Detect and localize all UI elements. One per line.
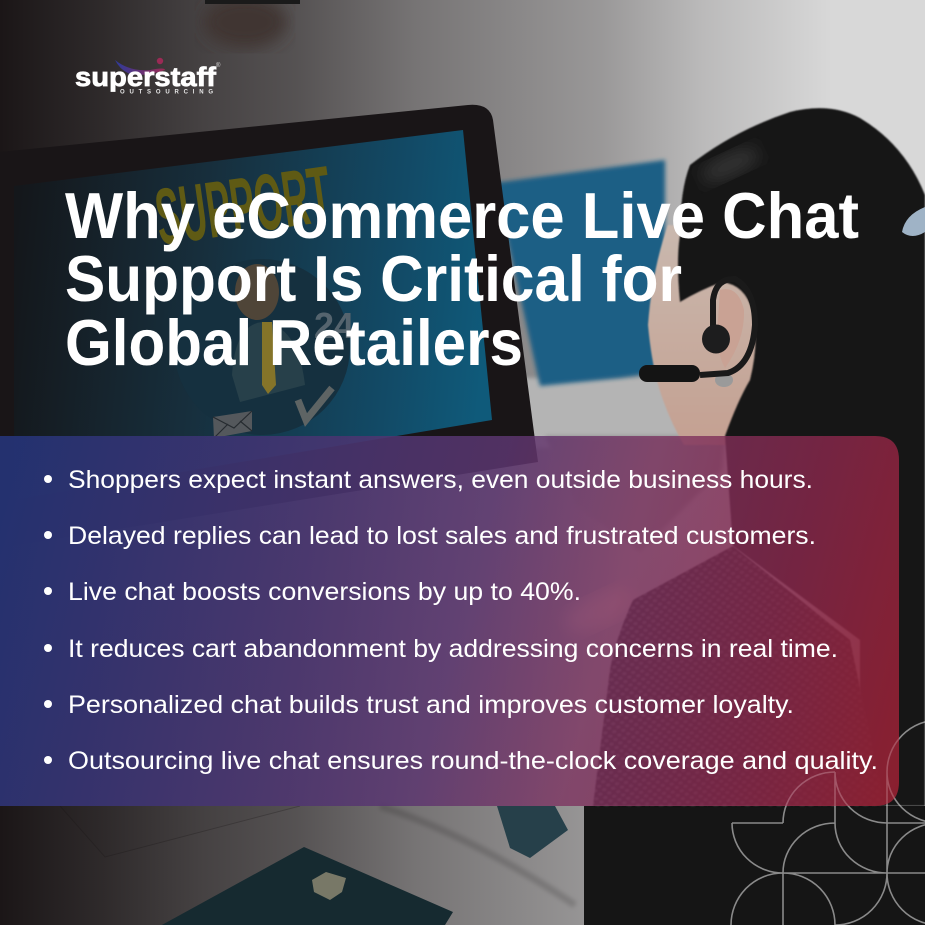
title: Global Retailers — [65, 306, 523, 379]
hair highlight — [696, 141, 764, 189]
earring — [715, 373, 733, 387]
logo: superstaff outsourcing: superstaff — [75, 62, 217, 92]
decorative geometric line pattern — [731, 720, 925, 925]
screen icon: check mark — [298, 388, 332, 420]
reason 1: Shoppers expect instant answers, even outside business hours. — [68, 466, 813, 494]
panel: key reasons — [0, 436, 899, 806]
logo: superstaff outsourcing: OUTSOURCING — [120, 90, 213, 96]
screen icon: envelope — [213, 411, 252, 438]
reason 5: Personalized chat builds trust and improves customer loyalty. — [68, 691, 794, 719]
ear — [717, 289, 744, 368]
sunglasses — [497, 806, 568, 858]
reason 2: Delayed replies can lead to lost sales and frustrated customers. — [68, 522, 816, 550]
bullet list — [44, 466, 878, 775]
woman: neck and face — [648, 225, 760, 445]
reason 4: It reduces cart abandonment by addressing concerns in real time. — [68, 635, 838, 663]
second blue monitor — [495, 160, 665, 386]
reason 6: Outsourcing live chat ensures round-the-clock coverage and quality. — [68, 747, 878, 775]
woman: hair tie — [902, 207, 925, 236]
main monitor — [0, 105, 538, 548]
title: Support Is Critical for — [65, 242, 682, 315]
closed notebook — [140, 847, 453, 925]
screen numeral: 24: 24 — [314, 305, 354, 346]
blurred object at top of photo — [203, 0, 300, 48]
main monitor: SUPPORT — [150, 149, 337, 262]
desk surface upper — [500, 378, 730, 448]
title — [65, 179, 859, 379]
stack of books under panel — [545, 436, 725, 552]
reason 3: Live chat boosts conversions by up to 40%. — [68, 578, 581, 606]
woman: hand on desk — [559, 579, 641, 641]
screen illustration: agent — [174, 259, 350, 435]
woman: hair — [678, 108, 925, 806]
headset — [639, 279, 755, 382]
logo: superstaff outsourcing: ® — [216, 62, 221, 69]
woman: knit sweater — [593, 546, 885, 806]
title: Why eCommerce Live Chat — [65, 179, 859, 252]
papers on desk — [60, 806, 300, 857]
woman: black dress — [584, 806, 925, 925]
